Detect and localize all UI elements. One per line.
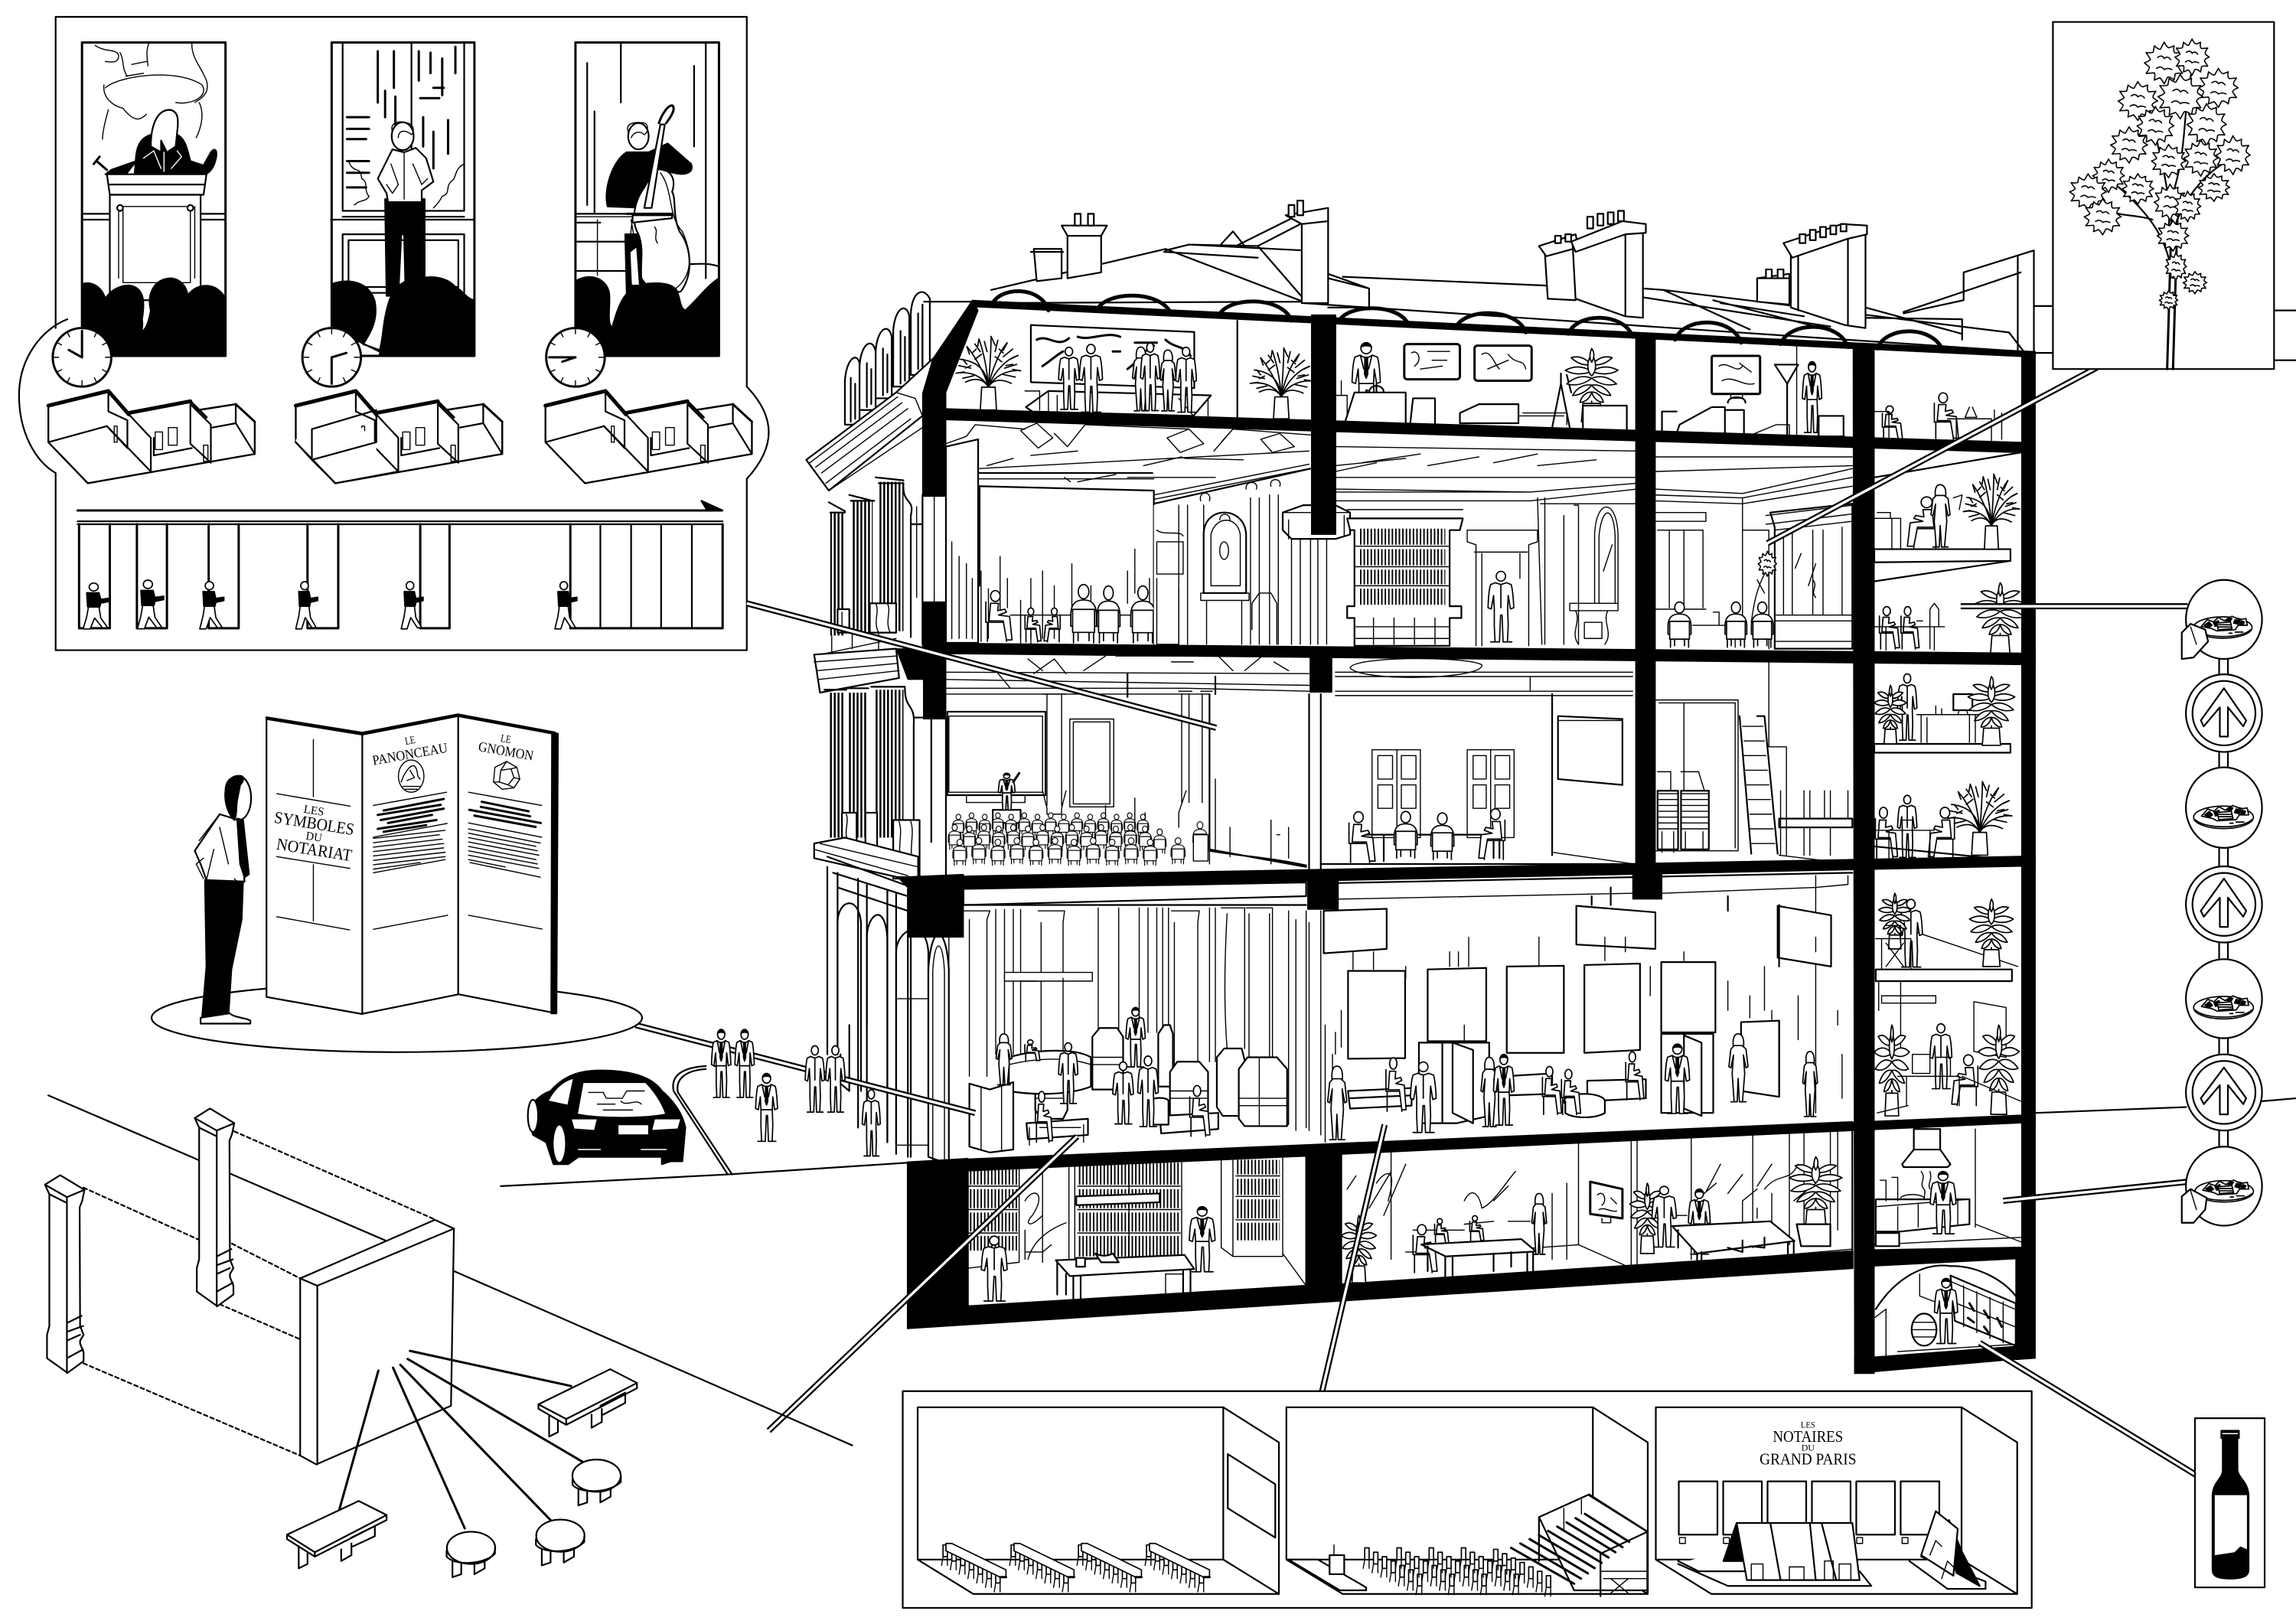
seated committee bbox=[986, 585, 1180, 644]
office 1 bbox=[1336, 343, 1627, 431]
foyer visitors bbox=[996, 1007, 1210, 1142]
lower orders: columns bbox=[824, 686, 946, 879]
timeline arrow bbox=[77, 501, 722, 524]
group outside entrance bbox=[712, 1029, 731, 1097]
ladder bbox=[1740, 716, 1778, 854]
clock 1 bbox=[53, 328, 111, 386]
plate bbox=[2186, 768, 2262, 848]
basement shell left room bbox=[907, 1154, 1853, 1329]
plate with hand bbox=[2182, 580, 2262, 659]
benches and seats bbox=[1348, 1074, 1646, 1117]
arched mirror and console bbox=[1570, 483, 1637, 644]
slabs bbox=[946, 409, 2021, 453]
table 2 bbox=[536, 1520, 585, 1565]
table 3 bbox=[447, 1531, 495, 1577]
meeting table bbox=[1365, 835, 1499, 861]
leader lines to building bbox=[635, 367, 2296, 1476]
interior: storage room with ladder and stacked chairs bbox=[1636, 659, 1852, 864]
table 1 bbox=[572, 1459, 621, 1505]
round plinth bbox=[152, 983, 642, 1052]
leader: first service plate bbox=[1961, 603, 2187, 609]
plate with hand bbox=[2182, 1146, 2262, 1226]
main cornice bbox=[806, 359, 933, 491]
furniture link lines bbox=[339, 1351, 585, 1528]
balcony cornice bbox=[814, 649, 899, 693]
interior: kitchen bbox=[1874, 1129, 2020, 1246]
podium and auctioneer bbox=[993, 810, 1021, 823]
interior: salon with cabinet and staff bbox=[1655, 504, 1852, 649]
wall title: DU bbox=[1802, 1443, 1815, 1453]
leader: kitchen to plate bbox=[2003, 1182, 2187, 1201]
top left sloped wall bbox=[922, 300, 978, 497]
tree panel bbox=[2053, 22, 2274, 369]
office 3 bbox=[1874, 393, 2001, 442]
leader: oak tree bbox=[1767, 367, 2097, 543]
palm right bbox=[1251, 348, 1313, 419]
screen bbox=[947, 712, 1045, 795]
panel 2: le panonceau bbox=[371, 734, 448, 929]
chimneys bbox=[1031, 201, 1867, 328]
table with team bbox=[1413, 1225, 1437, 1273]
palm left bbox=[956, 337, 1021, 410]
ground arcades bbox=[827, 856, 949, 1164]
leader: benches bbox=[768, 1136, 1077, 1430]
arrow circle bbox=[2186, 1055, 2262, 1130]
panel: conference room layouts bbox=[903, 1391, 2032, 1608]
clock 3 bbox=[546, 328, 605, 386]
upper orders: columns bbox=[820, 478, 934, 654]
visitor reading the screen bbox=[194, 776, 251, 1023]
pilaster back bbox=[194, 1108, 234, 1306]
columns and astronomical clock bbox=[1154, 468, 1350, 644]
layout 2: auditorium bbox=[1287, 1407, 1648, 1596]
door and walking figure bbox=[1467, 498, 1637, 646]
panel: modular room sequence bbox=[19, 17, 768, 651]
benches bbox=[1026, 1098, 1218, 1145]
interior: wine cellar bbox=[1874, 1266, 2016, 1356]
dashed projection lines bbox=[83, 1131, 435, 1456]
interior: meeting room with french doors bbox=[1321, 659, 1636, 864]
isometric room plan 2 bbox=[295, 391, 502, 483]
interior: ground floor foyer bbox=[951, 882, 1852, 1159]
leader: partition sequence bbox=[747, 603, 1216, 728]
exhibition screen on round plinth bbox=[152, 715, 642, 1052]
bench 1 bbox=[539, 1369, 637, 1436]
leader: exhibition screen bbox=[635, 1025, 975, 1113]
street lines bbox=[501, 1163, 908, 1186]
poster panels bbox=[1679, 1482, 1939, 1544]
leader: room layouts bbox=[1321, 1125, 1384, 1397]
meeting table bbox=[1025, 391, 1211, 416]
layout 1: classroom bbox=[918, 1407, 1279, 1594]
office 2 bbox=[1662, 340, 1845, 436]
handshake bbox=[1652, 1186, 1676, 1247]
hall back wall bbox=[980, 486, 1154, 644]
clock 2 bbox=[302, 328, 361, 386]
interior: attic office rooms bbox=[1336, 340, 2001, 442]
folding display left bbox=[1678, 1523, 1871, 1586]
interior: auction hall bbox=[946, 656, 1321, 876]
panel 3: le gnomon bbox=[468, 732, 542, 929]
title word: DU bbox=[305, 830, 323, 845]
colonnade bbox=[964, 908, 1287, 1126]
wall panels bbox=[1326, 938, 1842, 1142]
panel 2: le panonceau: LE bbox=[404, 734, 416, 748]
folding display right bbox=[1910, 1511, 1985, 1589]
vignette: speaker at window bbox=[331, 42, 475, 356]
audience bbox=[948, 813, 1208, 866]
balcony slab bbox=[814, 837, 918, 877]
title: les symboles du notariat: LES bbox=[303, 803, 325, 819]
bookcase bbox=[1347, 510, 1463, 646]
title word: NOTARIAT bbox=[276, 834, 354, 865]
interior: basement library bbox=[968, 1156, 1306, 1306]
wall title: LES bbox=[1801, 1421, 1815, 1430]
interior: basement meeting rooms bbox=[1342, 1130, 1852, 1284]
interior: attic gallery room bbox=[956, 321, 1313, 419]
reading table bbox=[1055, 1254, 1194, 1300]
interior: great hall with coffered ceiling bbox=[946, 423, 1852, 646]
vignette: auctioneer at podium bbox=[82, 42, 226, 356]
freestanding partitions bbox=[1419, 1021, 1779, 1123]
folding panels bbox=[266, 715, 558, 1014]
bench 2 bbox=[287, 1501, 386, 1568]
visitors bbox=[1058, 343, 1196, 413]
wall block bbox=[300, 1220, 454, 1464]
thin leader: arrow chain bbox=[2035, 1098, 2296, 1113]
isometric room plan 1 bbox=[48, 391, 255, 483]
dormer arcs bbox=[991, 291, 1943, 351]
stacked chairs bbox=[1658, 771, 1709, 853]
columns bbox=[1312, 315, 1336, 534]
interior: right column lower floors bbox=[1874, 893, 2020, 1116]
isometric room plan 3 bbox=[546, 391, 752, 483]
pilaster front bbox=[45, 1176, 84, 1373]
left pier bbox=[946, 439, 978, 643]
roof planes bbox=[972, 214, 2296, 360]
panel 3: le gnomon: GNOMON bbox=[478, 739, 535, 764]
ceiling coffers bbox=[946, 423, 1852, 530]
street with car and waiting group bbox=[501, 1029, 908, 1186]
exhibition visitors bbox=[1328, 1034, 1818, 1140]
arrow circle bbox=[2186, 866, 2262, 942]
title word: SYMBOLES bbox=[273, 807, 356, 839]
building section: left facade bbox=[805, 292, 974, 1172]
reception desk bbox=[1004, 973, 1092, 1094]
bookcases bbox=[968, 1157, 1306, 1286]
upturned table bbox=[1779, 819, 1852, 827]
leader: wine bottle bbox=[1980, 1343, 2198, 1476]
plate bbox=[2186, 959, 2262, 1039]
panel 1 text bbox=[277, 739, 350, 930]
wine bottle panel bbox=[2195, 1418, 2265, 1587]
interior: exhibition room bbox=[1324, 872, 1852, 1142]
roof slab bbox=[972, 300, 2035, 357]
car bbox=[528, 1071, 685, 1164]
tree bbox=[2069, 39, 2250, 369]
interior: right column upper floors bbox=[1874, 452, 2025, 861]
attic dormers bbox=[845, 292, 974, 425]
service chain: plate and arrow circles bbox=[2182, 580, 2262, 1226]
building structure: thick black section walls and slabs bbox=[896, 291, 2035, 1374]
arrow circle bbox=[2186, 674, 2262, 752]
panel 3: le gnomon: LE bbox=[500, 732, 512, 746]
wall title: NOTAIRES bbox=[1773, 1427, 1843, 1446]
panel 2: le panonceau: PANONCEAU bbox=[371, 740, 448, 768]
layout 3: exhibition bbox=[1656, 1407, 2017, 1594]
wall title: GRAND PARIS bbox=[1760, 1450, 1856, 1468]
blank end wall bbox=[1209, 694, 1321, 876]
vignette: double bass player bbox=[576, 42, 719, 356]
sliding partition sequence bbox=[79, 524, 722, 629]
folding exhibition screen bbox=[970, 1082, 1013, 1153]
building section: roof bbox=[972, 183, 2296, 360]
hanging signs bbox=[1324, 888, 1831, 967]
kitchen / cellar slab bbox=[1874, 1247, 2021, 1266]
exploded wall: pilasters and furniture bbox=[45, 1095, 853, 1577]
pillar and picture bbox=[1042, 694, 1066, 814]
painting bbox=[1031, 325, 1194, 388]
